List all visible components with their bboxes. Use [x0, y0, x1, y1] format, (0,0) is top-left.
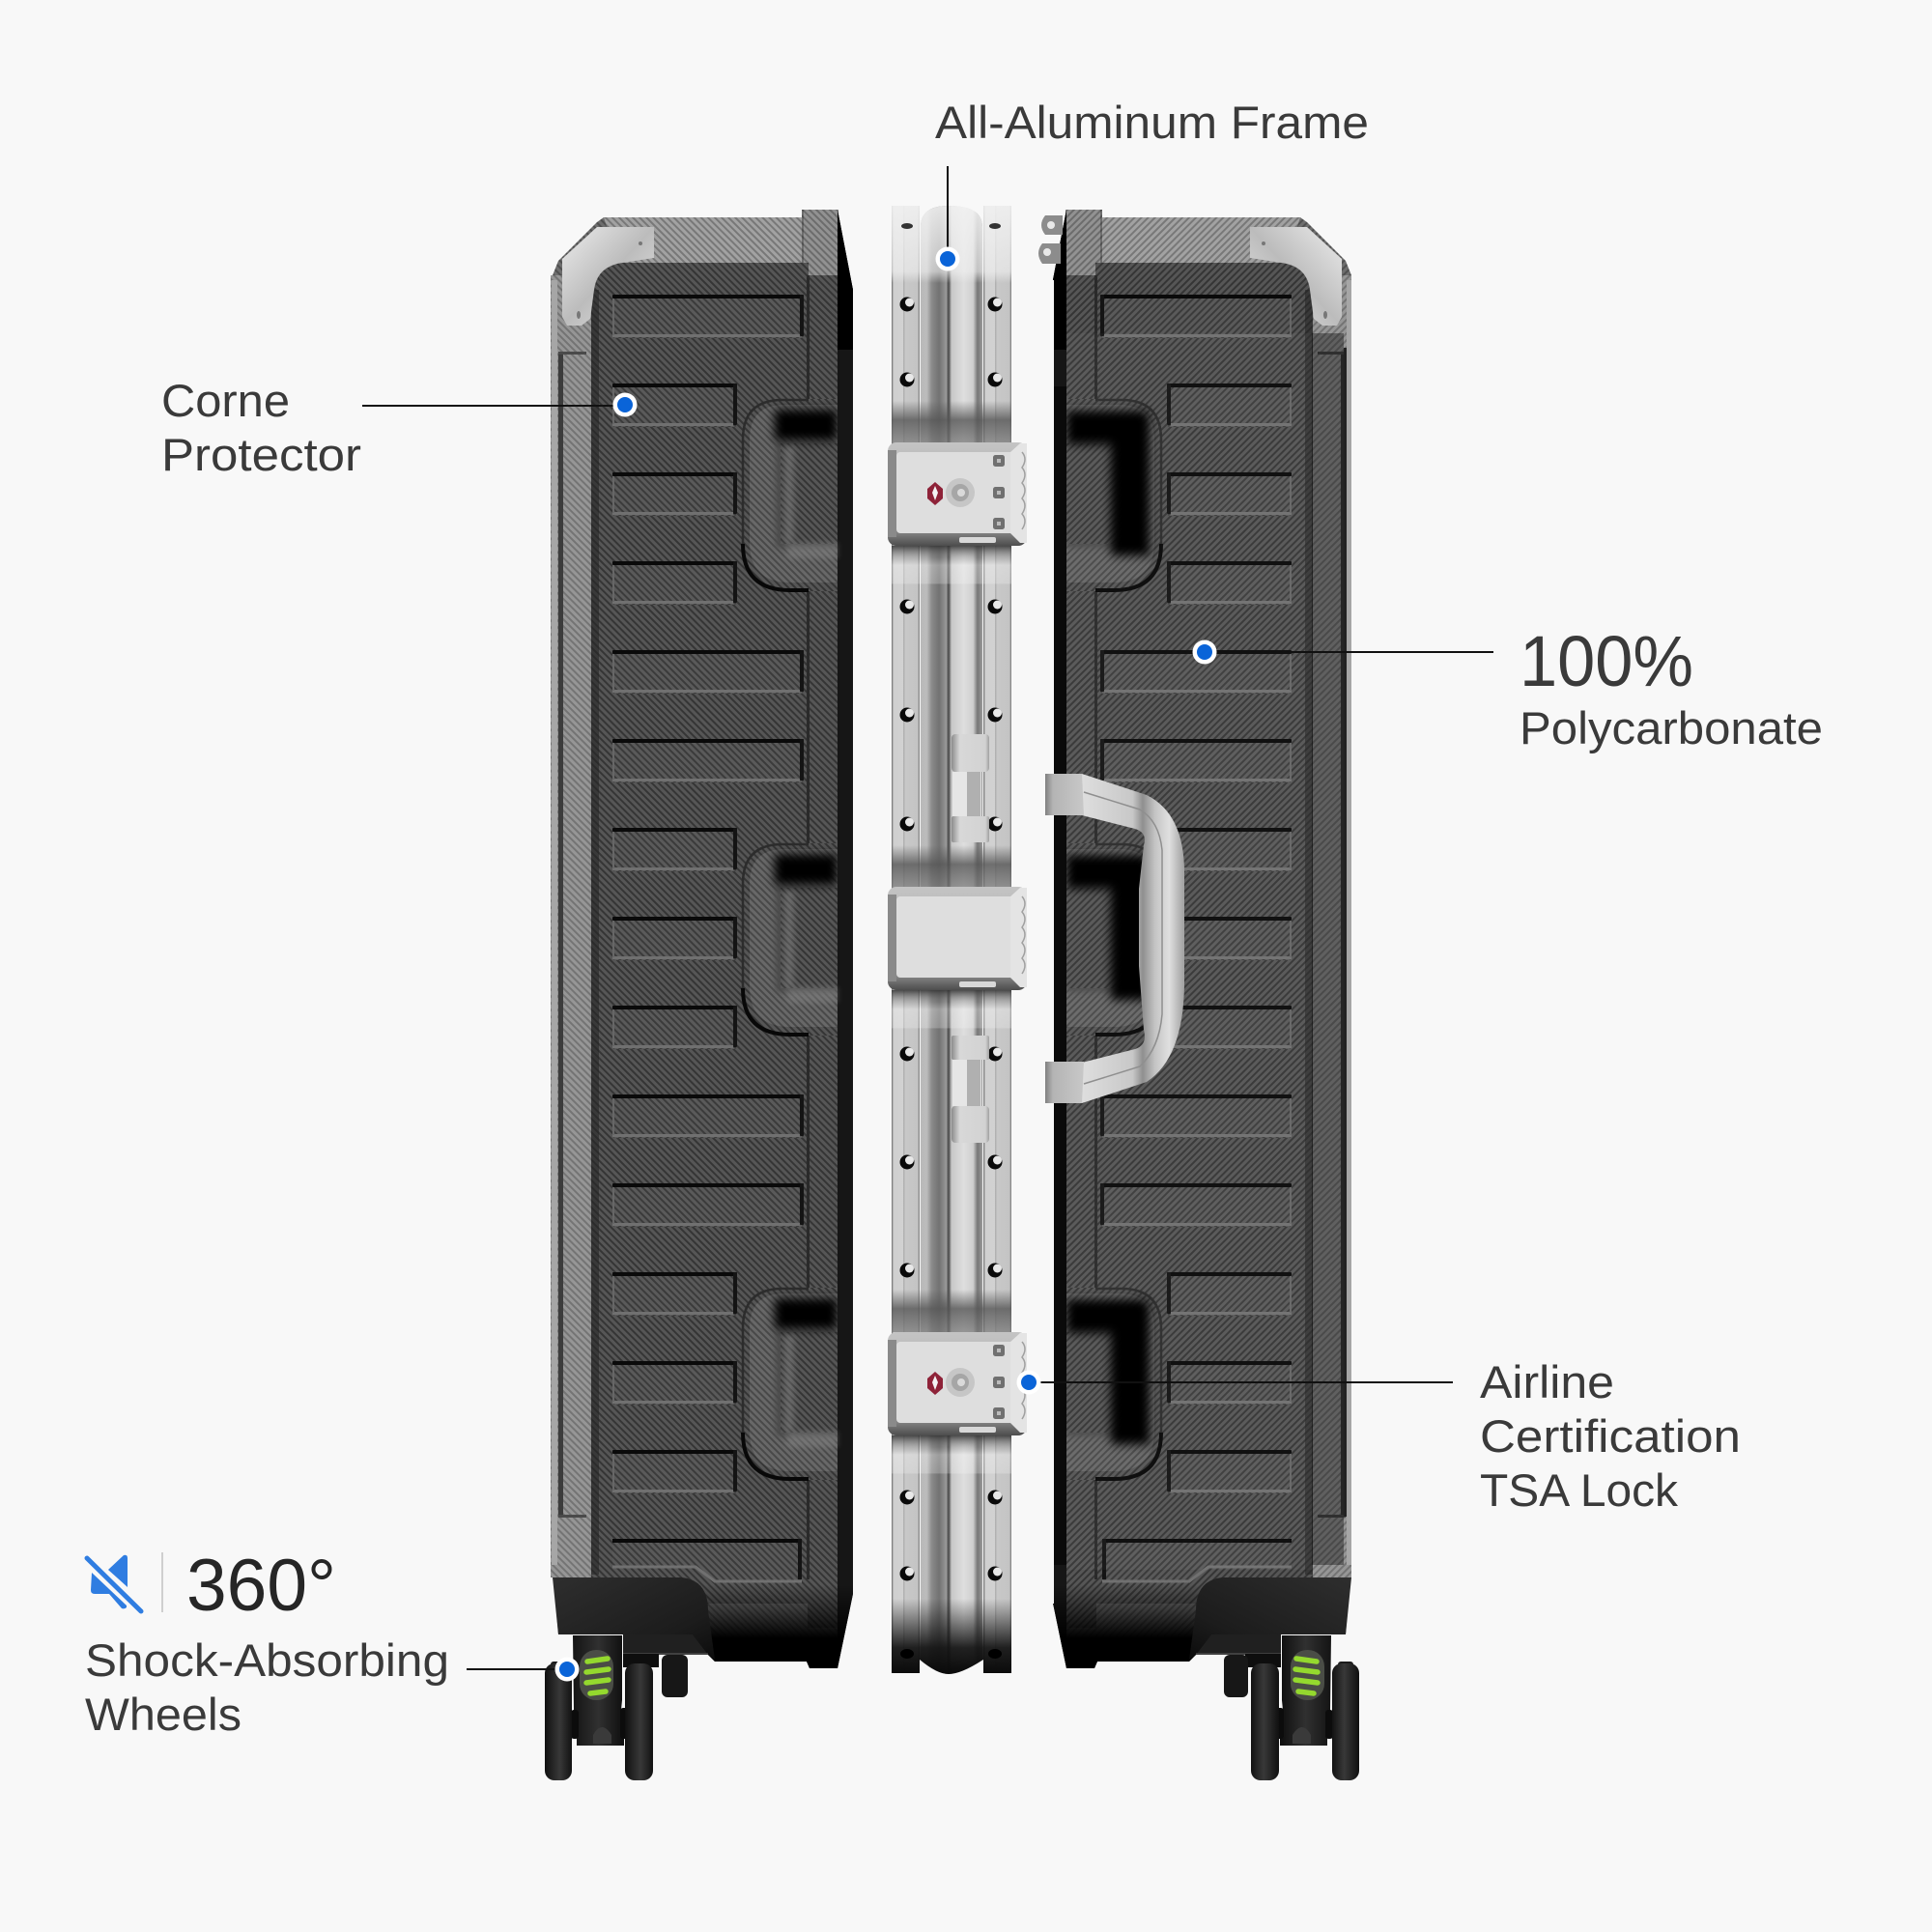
shell body — [1051, 210, 1353, 1668]
rear wheel — [1224, 1655, 1248, 1697]
stat: 360° — [186, 1545, 336, 1627]
right suitcase shell — [1038, 210, 1359, 1780]
shell body — [551, 210, 853, 1668]
leader line — [947, 166, 949, 259]
shell shading — [1049, 275, 1355, 1604]
heading: All-Aluminum Frame — [935, 97, 1369, 148]
label: Certification — [1480, 1410, 1741, 1462]
rear wheel — [662, 1655, 688, 1697]
marker — [1192, 639, 1217, 665]
leader line — [1029, 1381, 1453, 1383]
marker — [554, 1658, 580, 1681]
rivets — [900, 223, 1003, 1659]
label: Airline — [1480, 1356, 1614, 1407]
hinge tabs — [1038, 215, 1063, 264]
upper base — [1045, 774, 1084, 815]
front caster wheels — [545, 1635, 659, 1780]
divider — [161, 1552, 163, 1612]
label: Wheels — [85, 1689, 242, 1740]
marker — [935, 247, 960, 270]
label: Protector — [161, 429, 361, 480]
upper hinge — [952, 734, 989, 842]
top TSA lock — [888, 442, 1027, 546]
lower base — [1045, 1062, 1084, 1103]
grip edge lines — [1084, 792, 1162, 1084]
left suitcase shell — [545, 210, 853, 1780]
pocket shadows — [775, 399, 853, 1558]
callout: polycarbonate — [1192, 621, 1823, 753]
callout: corner protector — [161, 375, 638, 480]
bottom TSA lock — [888, 1332, 1027, 1435]
side handle — [1045, 774, 1184, 1103]
centre tube — [921, 206, 982, 1674]
leader line — [362, 405, 625, 407]
marker — [612, 392, 638, 417]
handle grip — [1082, 774, 1184, 1103]
callout: TSA lock — [1016, 1356, 1741, 1516]
right rail — [983, 206, 1011, 1673]
caster wheels — [1245, 1635, 1359, 1780]
leader line — [467, 1668, 567, 1670]
frame end highlights and shadows — [892, 206, 1011, 1674]
aluminum frame — [888, 206, 1027, 1674]
marker — [1016, 1370, 1041, 1395]
label: TSA Lock — [1480, 1464, 1679, 1516]
pocket highlights — [784, 446, 838, 1447]
left rail — [892, 206, 920, 1673]
lower hinge — [952, 1036, 989, 1143]
label: Corne — [161, 375, 290, 426]
leader line — [1205, 651, 1493, 653]
label: Polycarbonate — [1520, 702, 1823, 753]
icon: muted speaker — [87, 1555, 141, 1611]
middle latch — [888, 887, 1027, 990]
label: Shock-Absorbing — [85, 1634, 449, 1686]
pocket shadows — [1066, 411, 1150, 1444]
black opening edge — [1054, 386, 1066, 1565]
callout: shock-absorbing wheels — [85, 1545, 580, 1740]
stat: 100% — [1520, 621, 1693, 701]
callout: all-aluminum frame — [935, 97, 1369, 270]
